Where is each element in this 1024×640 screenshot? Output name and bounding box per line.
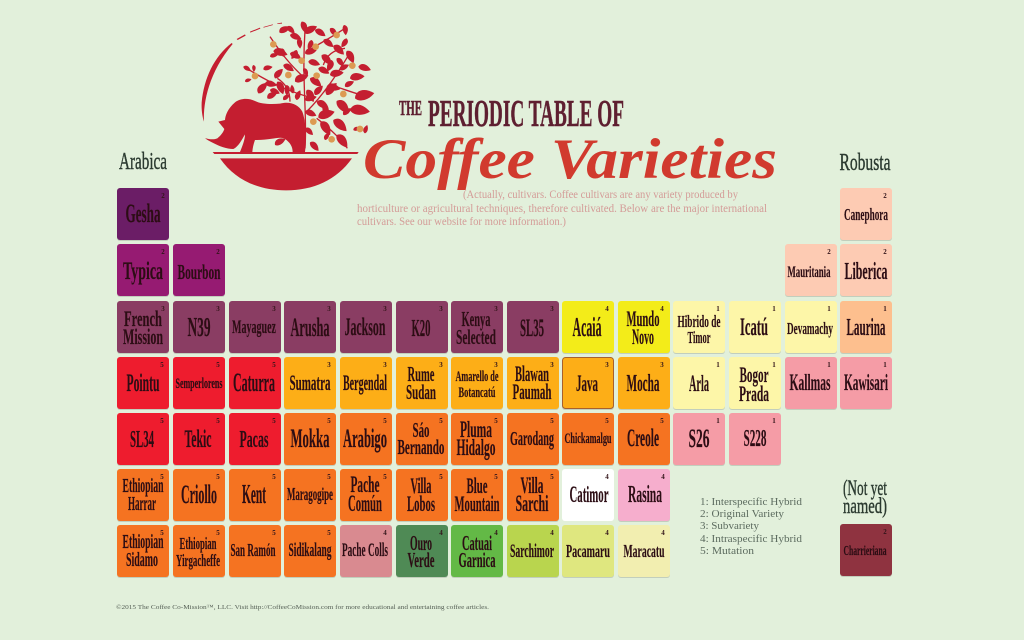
tile: Criollo: 5 <box>216 473 220 481</box>
tile: S228: 1 <box>772 417 776 425</box>
tile: Hibrido de Timor: Timor <box>688 328 711 347</box>
tile: Catimor: Catimor <box>570 482 608 507</box>
tile: Ethiopian Harrar: Harrar <box>128 493 156 515</box>
tile: Ouro Verde: Ouro <box>410 531 432 555</box>
tile: Mundo Novo: 4 <box>660 305 664 313</box>
tile: Kawisari: Kawisari <box>844 370 888 395</box>
tile: Semperlorens: Semperlorens <box>176 376 223 392</box>
tile: K20: 3 <box>439 305 443 313</box>
tile: Pache Común <box>340 469 392 522</box>
tile: Ethiopian Sidamo: Sidamo <box>126 549 158 571</box>
tile: Blue Mountain: Mountain <box>454 491 500 516</box>
tile: Kenya Selected: Kenya <box>462 307 491 331</box>
tile: Catuai Garnica <box>451 525 503 578</box>
tile: Typica <box>117 244 169 297</box>
tile: SL34 <box>117 413 169 466</box>
tile: Gesha: Gesha <box>126 199 160 228</box>
tile: N39: N39 <box>188 312 210 342</box>
tile: Catimor <box>562 469 614 521</box>
tile: Tekic: 5 <box>216 417 220 425</box>
tile: Ethiopian Sidamo: 5 <box>160 529 164 537</box>
tile: Bergendal <box>340 357 392 410</box>
tile: Arabigo: Arabigo <box>343 424 387 453</box>
tile: Chickamalgu <box>562 413 614 466</box>
tile: Arabigo: 5 <box>383 417 387 425</box>
tile: Arusha: Arusha <box>290 313 330 342</box>
tile: Maracatu: Maracatu <box>624 541 664 561</box>
tile: S228 <box>729 413 781 466</box>
tile: S26 <box>673 413 725 466</box>
tile: Arusha <box>284 301 336 354</box>
tile: Ethiopian Yirgacheffe: 5 <box>216 529 220 537</box>
legend: 3: Subvariety <box>700 520 759 532</box>
tile: Amarello de Botancatú <box>451 357 503 410</box>
tile: Hibrido de Timor: Hibrido de <box>678 312 721 331</box>
tile: Caturra <box>229 357 281 410</box>
tile: Laurina: Laurina <box>846 315 886 341</box>
tile: Mauritania: 2 <box>827 248 831 256</box>
tile: Villa Sarchi <box>507 469 559 522</box>
tile: Semperlorens <box>173 357 225 410</box>
tile: Arla <box>673 357 725 410</box>
coffee cherries <box>252 32 363 143</box>
tile: Ouro Verde: 4 <box>439 529 443 537</box>
tile: Liberica <box>840 244 892 297</box>
tile: Arusha: 3 <box>327 305 331 313</box>
tile: Villa Lobos: Villa <box>410 473 432 498</box>
tile: K20: K20 <box>412 316 430 342</box>
tile: Creole: Creole <box>627 425 659 452</box>
tile: Kent <box>229 469 281 522</box>
tile: Caturra: 5 <box>272 361 276 369</box>
tile: San Ramón: San Ramón <box>230 540 276 560</box>
tile: Acaiá: 4 <box>605 305 609 313</box>
tile: S26: 1 <box>716 417 720 425</box>
tile: Kent: Kent <box>242 479 266 509</box>
rhino <box>205 99 306 152</box>
heading: Robusta: Robusta <box>840 150 891 176</box>
tile: Sáo Bernando: 5 <box>439 417 443 425</box>
tile: Sarchimor <box>507 525 559 578</box>
tile: Arla: 1 <box>716 361 720 369</box>
tile: Pacas: Pacas <box>240 427 268 453</box>
tile: Rume Sudan: Rume <box>408 362 434 386</box>
tile: Blawan Paumah <box>507 357 559 410</box>
tile: Jackson <box>340 301 392 354</box>
tile: Rume Sudan: Sudan <box>406 380 436 404</box>
tile: Java <box>562 358 614 410</box>
tile: Sarchimor: 4 <box>550 529 554 537</box>
tile: Villa Sarchi: Sarchi <box>516 491 549 516</box>
tile: Liberica: Liberica <box>844 259 888 285</box>
tile: Garodang: Garodang <box>510 428 554 450</box>
tile: Canephora <box>840 188 892 241</box>
subtitle note <box>357 189 767 228</box>
tile: San Ramón <box>229 525 281 578</box>
tile: Catuai Garnica: 4 <box>494 529 498 537</box>
tile: Liberica: 2 <box>883 248 887 256</box>
tile: Pache Común: Pache <box>350 472 380 497</box>
tile: Blawan Paumah: 3 <box>550 361 554 369</box>
tile: Sumatra: Sumatra <box>290 370 330 395</box>
tile: Villa Lobos <box>396 469 448 522</box>
tile: K20 <box>396 301 448 354</box>
tile: Caturra: Caturra <box>233 368 275 397</box>
tile: Mauritania <box>785 244 837 297</box>
title: coffee varieties: Coffee Varieties <box>363 128 777 191</box>
heading: not yet named <box>843 475 887 518</box>
tile: Catuai Garnica: Catuai <box>462 531 492 555</box>
tile: Villa Sarchi: Villa <box>520 473 544 498</box>
tile: N39 <box>173 301 225 354</box>
tile: Canephora: 2 <box>883 192 887 200</box>
tile: Kawisari <box>840 357 892 410</box>
tile: Amarello de Botancatú: Botancatú <box>458 385 496 401</box>
tile: Pacamaru <box>562 525 614 578</box>
tile: Mocha: Mocha <box>626 371 660 397</box>
tile: Gesha <box>117 188 169 241</box>
tile: French Mission: 3 <box>161 305 165 313</box>
tile: Rasina: Rasina <box>628 482 662 508</box>
tile: Sáo Bernando: Sáo <box>412 418 430 442</box>
tile: Sidikalang: Sidikalang <box>288 540 332 561</box>
tile: SL35: 3 <box>550 305 554 313</box>
tile: Mayaguez: Mayaguez <box>232 317 276 338</box>
tile: San Ramón: 5 <box>272 529 276 537</box>
tile: Java: Java <box>576 371 598 396</box>
tile: Arabigo <box>340 413 392 466</box>
tile: Rume Sudan <box>396 357 448 410</box>
tile: Kallmas: Kallmas <box>790 370 831 395</box>
tile: Pache Colls: 4 <box>383 529 387 537</box>
tile: Jackson: Jackson <box>344 314 386 341</box>
tile: Sumatra <box>284 357 336 410</box>
tile: Charrieriana: 2 <box>883 528 887 536</box>
tile: Pacamaru: 4 <box>605 529 609 537</box>
tile: Villa Lobos: Lobos <box>407 491 435 516</box>
tile: Creole <box>618 413 670 466</box>
tile: Ethiopian Sidamo: Ethiopian <box>122 531 164 553</box>
tile: Garodang <box>507 413 559 466</box>
branches <box>247 28 370 148</box>
tile: Ouro Verde: Verde <box>408 548 434 572</box>
legend: 1: Interspecific Hybrid <box>700 496 803 508</box>
tile: SL34: 5 <box>160 417 164 425</box>
legend: 4: Intraspecific Hybrid <box>700 533 803 545</box>
tile: Bogor Prada: Bogor <box>740 362 769 387</box>
tile: Ethiopian Yirgacheffe: Yirgacheffe <box>176 551 220 570</box>
title: the periodic table of: PERIODIC TABLE OF <box>428 93 624 135</box>
tile: Pache Común: 5 <box>383 473 387 481</box>
tile: French Mission: Mission <box>123 324 163 349</box>
tile: SL35: SL35 <box>520 315 544 342</box>
tile: Hibrido de Timor: 1 <box>716 305 720 313</box>
tile: Pluma Hidalgo: 5 <box>494 417 498 425</box>
tile: Pluma Hidalgo: Pluma <box>460 417 492 442</box>
tile: Ethiopian Harrar <box>117 469 169 522</box>
tile: Blue Mountain: Blue <box>466 473 488 498</box>
tile: Maracatu <box>618 525 670 578</box>
logo: rhino and coffee plant in a circle <box>202 20 375 190</box>
tile: Tekic <box>173 413 225 466</box>
tile: Kent: 5 <box>272 473 276 481</box>
legend: 5: Mutation <box>700 545 755 557</box>
tile: Bergendal: Bergendal <box>343 370 387 395</box>
title: the periodic table of <box>399 93 624 135</box>
tile: Mundo Novo <box>618 301 670 354</box>
tile: Mundo Novo: Mundo <box>626 306 660 331</box>
tile: Sarchimor: Sarchimor <box>510 541 554 562</box>
tile: N39: 3 <box>216 305 220 313</box>
tile: Pluma Hidalgo: Hidalgo <box>456 435 496 460</box>
tile: Kenya Selected: Selected <box>456 325 496 349</box>
tile: Ouro Verde <box>396 525 448 578</box>
legend: 2: Original Variety <box>700 508 785 520</box>
heading: Arabica: Arabica <box>119 149 167 175</box>
tile: Ethiopian Harrar: Ethiopian <box>122 475 164 497</box>
tile: Pointu <box>117 357 169 410</box>
tile: Pache Común: Común <box>348 491 382 516</box>
tile: Sidikalang <box>284 525 336 578</box>
tile: Charrieriana: Charrieriana <box>844 544 886 559</box>
tile: Arla: Arla <box>689 371 709 396</box>
legend <box>700 496 803 557</box>
tile: Catimor: 4 <box>605 473 609 481</box>
tile: Rasina: 4 <box>661 473 665 481</box>
tile: Catuai Garnica: Garnica <box>458 548 496 572</box>
leaves <box>242 20 375 153</box>
tile: Sumatra: 3 <box>327 361 331 369</box>
tile: Mayaguez <box>229 301 281 354</box>
band and bowl <box>213 152 359 154</box>
tile: Ethiopian Harrar: 5 <box>160 473 164 481</box>
tile: Devamachy <box>785 301 837 354</box>
subtitle note: horticulture or agricultural techniques, therefore cultivated. Below are the major international <box>357 203 767 215</box>
tile: Ethiopian Sidamo <box>117 525 169 578</box>
tile: Creole: 5 <box>660 417 664 425</box>
tile: Maracatu: 4 <box>661 529 665 537</box>
tile: Pacamaru: Pacamaru <box>566 541 610 561</box>
tile: Rasina <box>618 469 670 522</box>
tile: Laurina <box>840 301 892 354</box>
footer credit: ©2015 The Coffee Co-Mission™, LLC. Visit http://CoffeeCoMission.com for more educational and entertaining coffee articles. <box>116 604 489 611</box>
tile: Blawan Paumah: Paumah <box>512 379 552 404</box>
tile: Villa Lobos: 5 <box>439 473 443 481</box>
tile: Pluma Hidalgo <box>451 413 503 466</box>
tile: SL34: SL34 <box>130 427 154 453</box>
tile: Maragogipe <box>284 469 336 522</box>
tile: Bergendal: 3 <box>383 361 387 369</box>
tile: Villa Sarchi: 5 <box>550 473 554 481</box>
tile: Pache Colls <box>340 525 392 578</box>
tile: Maragogipe: Maragogipe <box>287 484 333 504</box>
tile: S26: S26 <box>688 424 710 453</box>
tile: Mokka: Mokka <box>290 424 330 453</box>
tile: Kawisari: 1 <box>883 361 887 369</box>
heading: not yet named: named) <box>843 493 887 518</box>
tile: Mauritania: Mauritania <box>788 264 830 281</box>
tile: Blue Mountain <box>451 469 503 522</box>
tile: Bourbon: 2 <box>216 248 220 256</box>
tile: Bourbon <box>173 244 225 297</box>
tile: Pointu: 5 <box>160 361 164 369</box>
tile: Mayaguez: 3 <box>272 305 276 313</box>
tile: Acaiá <box>562 301 614 354</box>
tile: Kallmas <box>785 357 837 410</box>
tile: Semperlorens: 5 <box>216 361 220 369</box>
tile: S228: S228 <box>744 426 766 452</box>
tile: Icatú <box>729 301 781 354</box>
tile: Amarello de Botancatú: 3 <box>494 361 498 369</box>
tile: Mocha <box>618 357 670 410</box>
tile: Blawan Paumah: Blawan <box>515 361 549 386</box>
tile: Tekic: Tekic <box>184 426 212 453</box>
subtitle note: (Actually, cultivars. Coffee cultivars are any variety produced by <box>463 189 738 201</box>
tile: Bogor Prada: Prada <box>739 381 769 406</box>
tile: Criollo: Criollo <box>181 480 217 509</box>
tile: Mocha: 3 <box>660 361 664 369</box>
tile: Mundo Novo: Novo <box>632 324 654 349</box>
tile: Pointu: Pointu <box>126 370 160 397</box>
tile: Java: 3 <box>605 361 609 369</box>
tile: Pache Colls: Pache Colls <box>342 540 388 561</box>
heading: not yet named: (Not yet <box>843 475 887 500</box>
subtitle note: cultivars. See our website for more information.) <box>357 216 566 228</box>
tile: Gesha: 2 <box>161 192 165 200</box>
tile: Canephora: Canephora <box>844 205 888 224</box>
tile: Mokka: 5 <box>327 417 331 425</box>
tile: Blue Mountain: 5 <box>494 473 498 481</box>
tile: Charrieriana <box>840 524 892 577</box>
tile: Hibrido de Timor <box>673 301 725 354</box>
tile: Mokka <box>284 413 336 466</box>
tile: Devamachy: Devamachy <box>787 319 833 338</box>
tile: Bogor Prada: 1 <box>772 361 776 369</box>
tile: Sáo Bernando <box>396 413 448 466</box>
tile: Jackson: 3 <box>383 305 387 313</box>
tile: Kallmas: 1 <box>827 361 831 369</box>
tile: Amarello de Botancatú: Amarello de <box>456 369 499 385</box>
tile: Laurina: 1 <box>883 305 887 313</box>
tile: Bogor Prada <box>729 357 781 410</box>
tile: Sidikalang: 5 <box>327 529 331 537</box>
tile: Kenya Selected: 3 <box>494 305 498 313</box>
tile: Pacas: 5 <box>272 417 276 425</box>
tile: Chickamalgu: 5 <box>605 417 609 425</box>
tile: Bourbon: Bourbon <box>178 260 221 284</box>
tile: Acaiá: Acaiá <box>572 312 602 342</box>
tile: Pacas <box>229 413 281 466</box>
tile: Ethiopian Yirgacheffe: Ethiopian <box>180 534 217 553</box>
tile: Criollo <box>173 469 225 522</box>
tile: Rume Sudan: 3 <box>439 361 443 369</box>
tile: Typica: Typica <box>123 258 163 285</box>
tile: Kenya Selected <box>451 301 503 354</box>
tile: French Mission: French <box>124 306 162 331</box>
tile: Sáo Bernando: Bernando <box>398 435 444 459</box>
tile: Icatú: 1 <box>772 305 776 313</box>
tile: French Mission <box>117 301 169 354</box>
tile: Maragogipe: 5 <box>327 473 331 481</box>
tile: Garodang: 5 <box>550 417 554 425</box>
tile: Devamachy: 1 <box>827 305 831 313</box>
tile: SL35 <box>507 301 559 354</box>
tile: Ethiopian Yirgacheffe <box>173 525 225 578</box>
title: the periodic table of: THE <box>399 96 422 120</box>
tile: Icatú: Icatú <box>740 314 768 341</box>
tile: Typica: 2 <box>161 248 165 256</box>
tile: Chickamalgu: Chickamalgu <box>564 431 612 447</box>
